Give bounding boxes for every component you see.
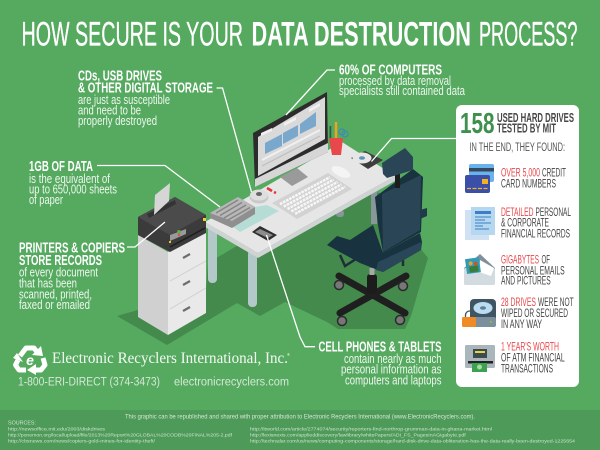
finding: ATM transactions: TRANSACTIONS xyxy=(501,362,553,376)
callout: printers and copiers: PRINTERS & COPIERS xyxy=(19,240,125,256)
callout: printers and copiers: of every document xyxy=(19,266,98,280)
callout: 60% of computers xyxy=(286,62,465,115)
finding: ATM transactions xyxy=(465,340,565,376)
monitor stand xyxy=(280,168,308,186)
printer xyxy=(138,183,206,252)
headrest xyxy=(395,172,400,188)
callout: 60% of computers: specialists still contained data xyxy=(339,84,465,98)
panel heading xyxy=(460,108,574,140)
contact details: electronicrecyclers.com xyxy=(174,377,289,389)
panel heading: 158 xyxy=(460,108,494,140)
sources: http://cbsnews.com/news/copiers-gold-mines-for-identity-theft/ xyxy=(8,439,156,444)
CD drive xyxy=(351,151,383,169)
chair supports xyxy=(340,250,403,266)
finding: emails and pictures: OF xyxy=(542,252,550,266)
callout: digital storage: & OTHER DIGITAL STORAGE xyxy=(78,80,213,96)
callout: cell phones and tablets: computers and laptops xyxy=(345,373,442,387)
pen cup xyxy=(329,122,348,155)
finding: credit cards: OVER 5,000 xyxy=(501,166,540,180)
callout: digital storage: and need to be xyxy=(78,104,141,118)
sources: http://itworld.com/article/2774074/security/reporters-find-northrop-grumman-data-in-ghana-market.html xyxy=(250,427,492,432)
office chair xyxy=(327,148,427,326)
finding: financial records: & CORPORATE xyxy=(501,216,549,230)
finding: credit cards: CARD NUMBERS xyxy=(501,177,556,191)
callout: printers and copiers: faxed or emailed xyxy=(19,298,90,312)
callout: 1GB of data: of paper xyxy=(29,193,63,207)
footer band xyxy=(0,410,600,450)
callout: 1GB of data xyxy=(29,159,220,207)
finding: financial records xyxy=(465,205,571,241)
callout: cell phones and tablets: CELL PHONES & TABLETS xyxy=(318,340,442,356)
desk illustration xyxy=(138,92,427,335)
finding: unsecured drives: IN ANY WAY xyxy=(501,317,542,331)
callout: printers and copiers: that has been xyxy=(19,276,77,290)
chair seat xyxy=(327,225,422,272)
keyboard xyxy=(272,173,352,219)
icon: recycling logo xyxy=(13,346,45,375)
callout: digital storage: properly destroyed xyxy=(78,114,157,128)
finding: unsecured drives xyxy=(462,295,574,331)
contact details: 1-800-ERI-DIRECT (374-3473) xyxy=(18,377,160,389)
callout: cell phones and tablets: personal information as xyxy=(341,362,442,376)
glass sheet xyxy=(232,205,279,232)
monitor xyxy=(253,92,328,187)
finding: credit cards xyxy=(465,164,566,193)
floor shadow xyxy=(117,180,428,345)
finding: financial records: DETAILED xyxy=(501,205,534,219)
finding: financial records: PERSONAL xyxy=(536,205,571,219)
chair back xyxy=(375,169,423,253)
sources: SOURCES: xyxy=(8,420,36,426)
sources: http://ponemon.org/local/upload/file/2013%20Report%20GLOBAL%20CODB%20FINAL%205-2.pdf xyxy=(8,433,233,438)
panel heading: TESTED BY MIT xyxy=(497,122,556,136)
icon: recycling logo: e xyxy=(26,352,34,368)
sources: http://techradar.com/us/news/computing-components/storage/hard-disk-drive-data-obliteration-has-the-data-really-been-destroyed-1225654 xyxy=(250,439,575,444)
title: DATA DESTRUCTION xyxy=(252,16,471,54)
finding: ATM transactions: 1 YEAR'S WORTH xyxy=(501,340,559,354)
desk top xyxy=(205,176,395,258)
callout: digital storage: are just as susceptible xyxy=(78,93,170,107)
callout: 60% of computers: processed by data removal xyxy=(339,74,451,88)
sources: http://newsoffice.mit.edu/2003/diskdrives xyxy=(8,427,106,432)
callout: printers and copiers: STORE RECORDS xyxy=(19,253,102,269)
printer cabinet xyxy=(138,232,206,335)
sources xyxy=(8,420,575,444)
callout: printers and copiers: scanned, printed, xyxy=(19,287,92,301)
finding: credit cards: CREDIT xyxy=(542,166,566,180)
finding: emails and pictures: AND PICTURES xyxy=(501,274,551,288)
storage hub and USB drives xyxy=(250,188,276,204)
callout: 60% of computers: 60% OF COMPUTERS xyxy=(339,62,442,78)
republish notice: This graphic can be republished and shared with proper attribution to Electronic Recyclers International (www.ElectronicRecyclers.com). xyxy=(125,414,475,420)
company name: ® xyxy=(287,352,290,357)
company name: Electronic Recyclers International, Inc. xyxy=(52,350,288,367)
sources: http://lexisnexis.com/applieddiscovery/lawlibrary/whitePapers/ADI_FS_PagesInAGigabyte.pdf xyxy=(250,433,467,438)
callout: digital storage: CDs, USB DRIVES xyxy=(78,68,162,84)
finding: emails and pictures xyxy=(464,252,565,288)
finding: unsecured drives: 28 DRIVES xyxy=(501,295,536,309)
callout: cell phones and tablets: contain nearly as much xyxy=(344,352,442,366)
callout: cell phones and tablets xyxy=(266,235,442,387)
panel: MIT hard drive findings xyxy=(372,105,579,387)
callout: digital storage xyxy=(78,68,252,192)
title: HOW SECURE IS YOUR xyxy=(22,16,243,54)
paper tray xyxy=(210,197,255,228)
callout: 1GB of data: 1GB OF DATA xyxy=(29,159,93,175)
desk legs xyxy=(208,190,377,307)
mouse xyxy=(330,164,352,180)
callout: printers and copiers xyxy=(19,222,165,312)
callout: 1GB of data: up to 650,000 sheets xyxy=(29,182,117,196)
chair base xyxy=(334,268,408,326)
contact details xyxy=(18,377,289,389)
finding: emails and pictures: GIGABYTES xyxy=(501,252,539,266)
callout: 1GB of data: is the equivalent of xyxy=(29,172,110,186)
title xyxy=(22,16,578,54)
tablet xyxy=(252,226,277,241)
